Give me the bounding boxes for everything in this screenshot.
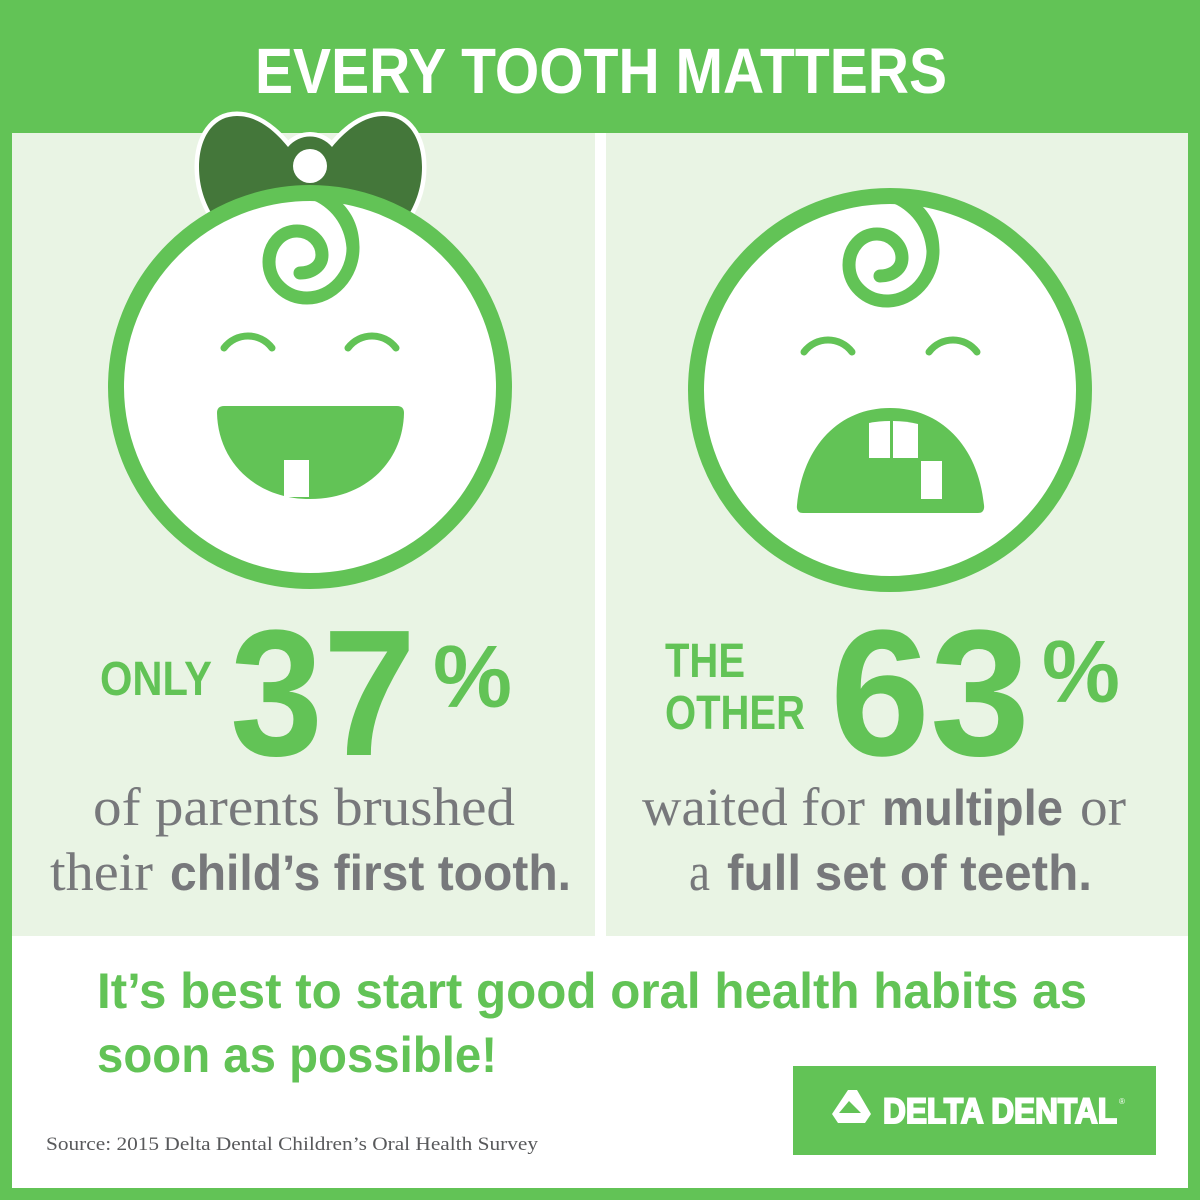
hair curl — [849, 202, 940, 301]
stat: 63%: % — [1042, 622, 1120, 721]
callout message: It’s best to start good oral health habits as — [97, 963, 1087, 1019]
panel: right — [606, 133, 1188, 936]
right caption: waited for — [642, 777, 865, 837]
right caption: or — [1080, 777, 1126, 837]
callout message: soon as possible! — [97, 1027, 497, 1083]
stat: 37%: % — [433, 627, 512, 726]
stat: 37% — [100, 593, 512, 794]
head — [696, 196, 1084, 584]
left caption: child’s first tooth. — [170, 845, 571, 901]
stat: 63%: 63 — [830, 593, 1030, 794]
stat: 63%: THE — [665, 635, 745, 688]
left caption: their — [50, 842, 153, 902]
title: EVERY TOOTH MATTERS — [255, 35, 947, 107]
left caption — [50, 777, 571, 902]
logo: Delta Dental — [793, 1066, 1156, 1155]
stat: 63% — [665, 593, 1120, 794]
logo: Delta Dental: DELTA DENTAL — [883, 1092, 1117, 1131]
mouth with one tooth — [217, 406, 404, 499]
stat: 37%: 37 — [230, 593, 416, 794]
source note: Source: 2015 Delta Dental Children’s Oral Health Survey — [46, 1134, 539, 1155]
eyes — [224, 336, 396, 348]
right caption: full set of teeth. — [727, 845, 1092, 901]
right caption — [642, 777, 1126, 902]
stat: 37%: ONLY — [100, 653, 212, 706]
stat: 63%: OTHER — [665, 687, 805, 740]
icon: happy baby face — [116, 193, 504, 581]
right caption: a — [689, 842, 710, 902]
icon: delta triangle — [832, 1090, 871, 1123]
eyes — [804, 340, 977, 352]
panel: left — [12, 133, 595, 936]
right caption: multiple — [882, 780, 1063, 836]
logo: Delta Dental: ® — [1119, 1097, 1125, 1106]
callout message — [97, 963, 1087, 1083]
hair curl — [269, 199, 360, 298]
head — [116, 193, 504, 581]
icon: bow — [199, 116, 422, 216]
left caption: of parents brushed — [93, 777, 515, 837]
mouth with teeth — [797, 408, 984, 513]
icon: crying baby face — [696, 196, 1084, 584]
